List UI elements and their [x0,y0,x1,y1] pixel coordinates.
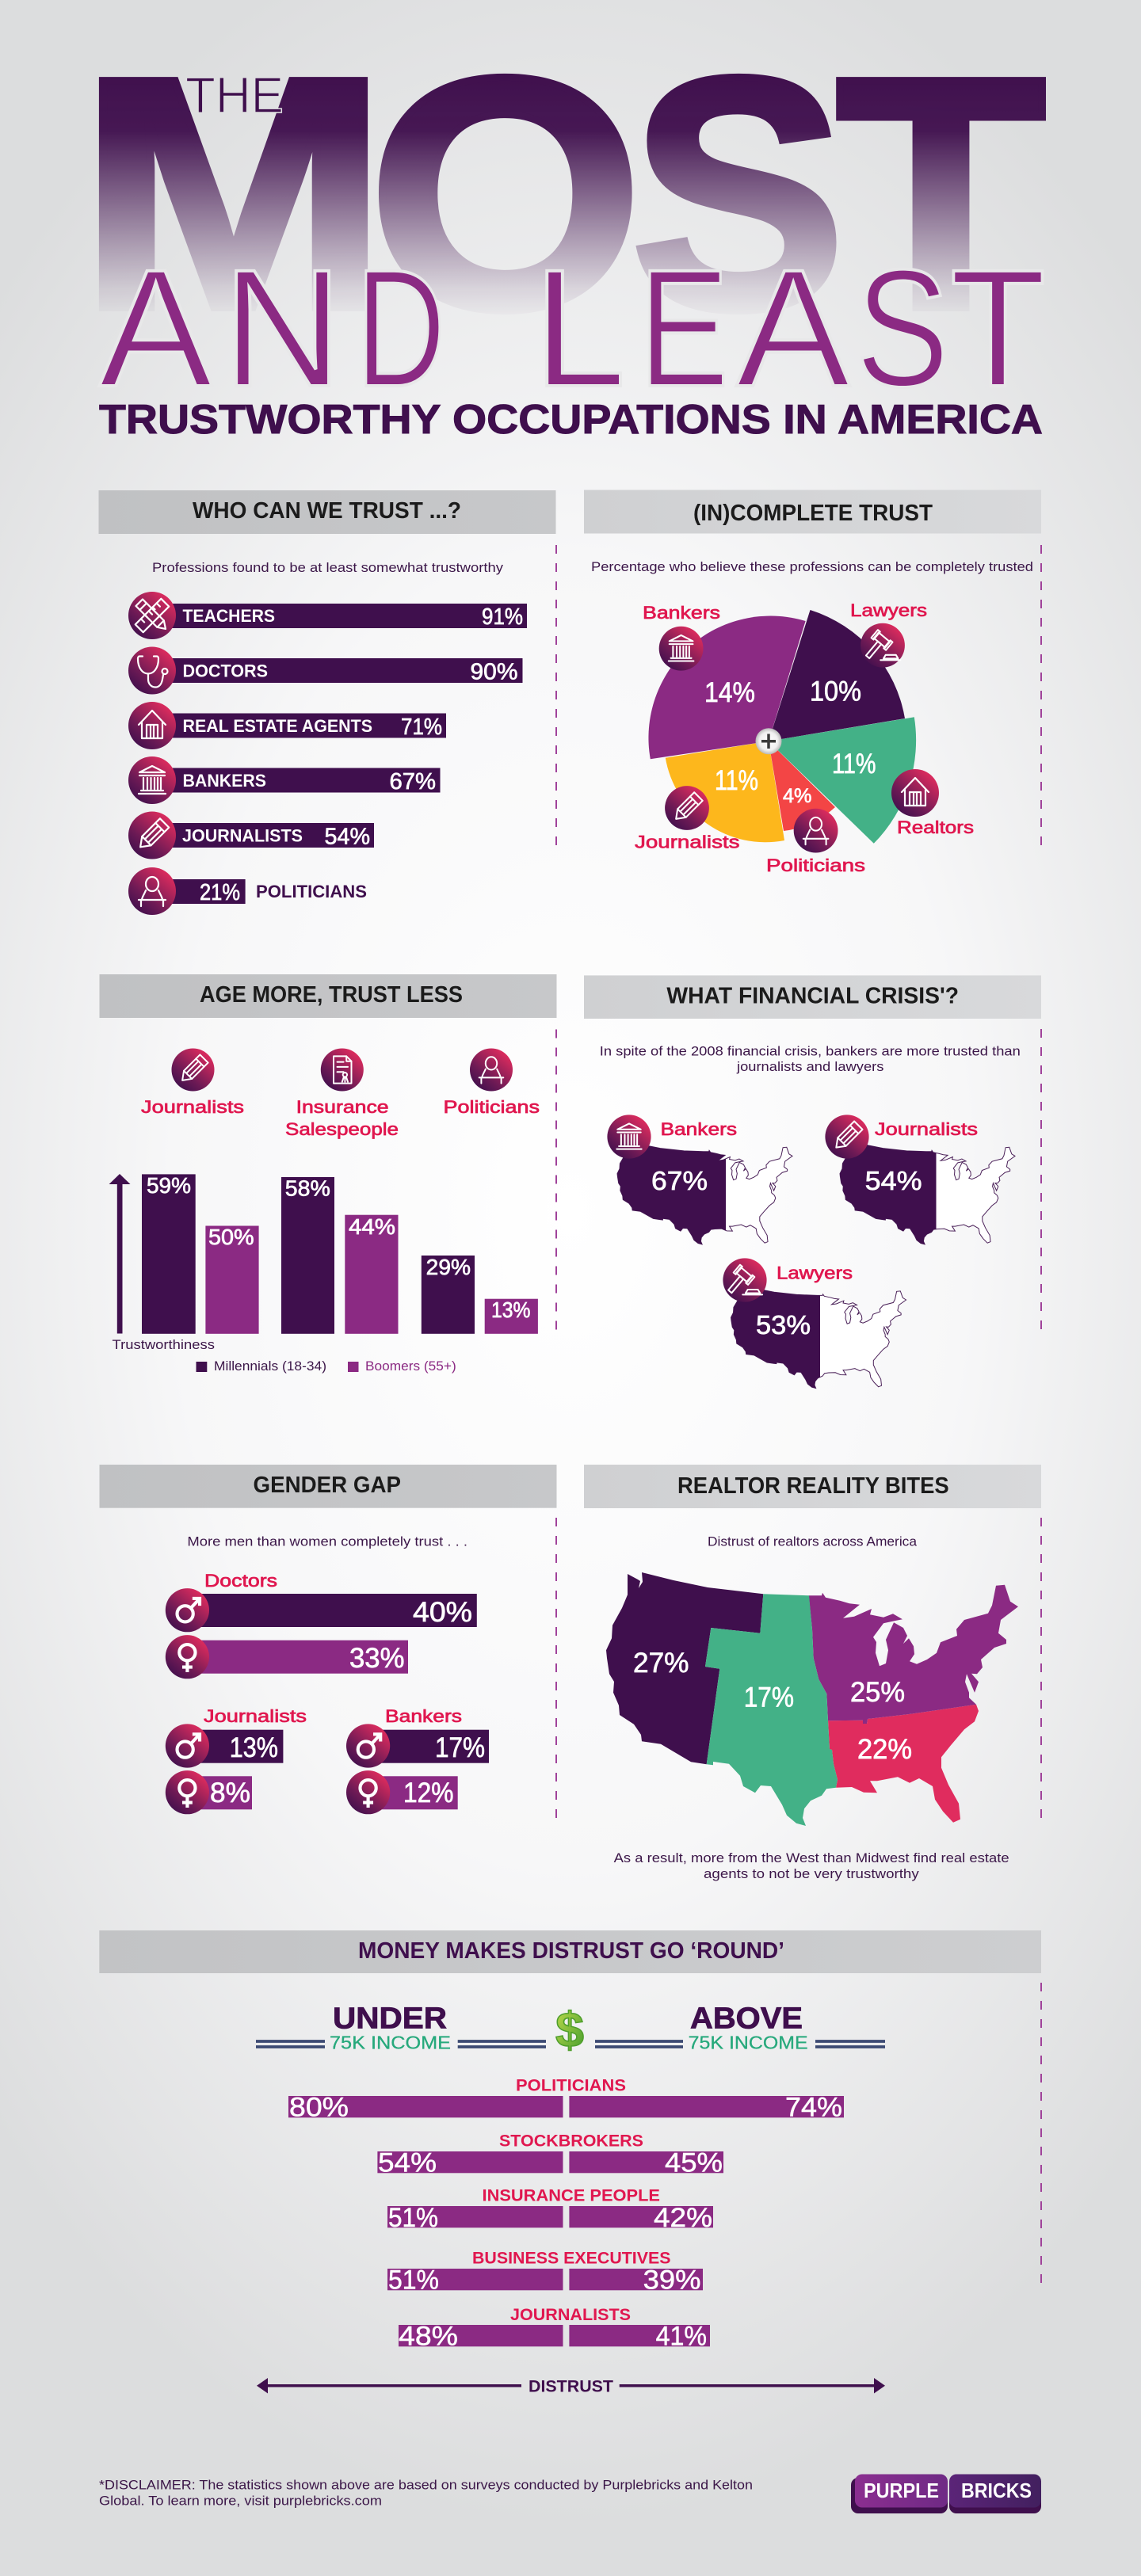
legend: above 75k: ABOVE [690,2002,803,2036]
arrow: trustworthiness axis [109,1174,130,1334]
heading bar [584,490,1041,534]
title words: AND LEAST: L [533,234,626,421]
map: bankers: Bankers [661,1119,737,1139]
pie label: lawyers: Lawyers [850,600,927,620]
bar: politicians: POLITICIANS [256,882,367,901]
bar: teachers: TEACHERS [182,606,275,626]
bar: real estate agents [128,702,446,749]
group: bankers: Bankers [385,1706,462,1726]
paragraph [614,1850,1009,1881]
regional US map [606,1572,1018,1826]
heading bar [584,975,1041,1019]
pie label: journalists [635,786,740,852]
group: bankers: 12% [403,1778,453,1808]
legend: Millennials (18-34) [214,1359,326,1374]
panel: money makes distrust go round [99,1930,1041,2395]
bar chart: 58% [285,1176,330,1201]
row: journalists: JOURNALISTS [510,2306,631,2324]
row: insurance people: INSURANCE PEOPLE [482,2187,660,2205]
bar: real estate agents: 71% [401,714,442,740]
map: journalists [825,1115,1015,1244]
bar: politicians: 21% [200,880,240,905]
heading bar [584,1465,1041,1508]
title word: MOST: O [368,10,643,379]
group: journalists [166,1706,307,1814]
subtitle: Percentage who believe these professions can be completely trusted [591,559,1033,574]
group: journalists: 8% [210,1778,250,1808]
regional US map: 25% [850,1677,905,1708]
panel: gender gap [100,1465,556,1820]
pie label: bankers [643,603,720,671]
title words: AND LEAST: N [223,234,342,421]
pie chart: 11% [715,765,758,796]
disclaimer: Global. To learn more, visit purplebricks.com [99,2493,382,2508]
paragraph: As a result, more from the West than Midwest find real estate [614,1850,1009,1865]
pie label: politicians: Politicians [766,855,865,875]
bar chart: 44% [349,1214,395,1239]
title words: AND LEAST: D [356,234,480,421]
heading: GENDER GAP [254,1473,401,1498]
title word: THE: THE [185,67,284,124]
bar chart: 13% [491,1298,530,1322]
heading: REALTOR REALITY BITES [677,1473,949,1499]
pie label: realtors [891,769,974,837]
row: stockbrokers: 45% [665,2148,723,2178]
bar chart: 50% [208,1225,254,1249]
heading: WHAT FINANCIAL CRISIS'? [666,983,959,1008]
legend [197,1359,456,1374]
logo: Purplebricks: PURPLE [864,2479,939,2502]
legend: Boomers (55+) [365,1359,456,1374]
row: politicians [288,2076,844,2123]
subtitle: Distrust of realtors across America [708,1534,918,1549]
subtitle: In spite of the 2008 financial crisis, bankers are more trusted than [600,1044,1021,1058]
panel: what financial crisis [584,975,1041,1389]
group: doctors [166,1571,477,1679]
group: bankers: 17% [435,1732,485,1763]
panel: who can we trust [98,490,556,915]
title words: AND LEAST: E [639,234,729,421]
pie chart: 4% [783,785,811,807]
row: politicians: 74% [785,2093,842,2123]
map: lawyers: 53% [756,1311,811,1340]
legend: above 75k [595,2002,885,2053]
row: journalists [399,2306,710,2352]
arrow: distrust axis [257,2377,885,2395]
title [98,73,1046,434]
icon: dollar sign: $ [555,2003,584,2058]
column label: politicians [444,1049,540,1117]
heading bar [99,1930,1041,1973]
pie chart: 11% [832,749,876,779]
row: politicians: 80% [289,2093,349,2123]
bar: doctors: 90% [471,659,518,684]
pie chart [648,610,916,844]
subtitle: More men than women completely trust . . . [187,1534,467,1549]
group: bankers [346,1706,489,1814]
group: journalists: Journalists [204,1706,307,1726]
heading: AGE MORE, TRUST LESS [200,982,463,1008]
disclaimer: *DISCLAIMER: The statistics shown above are based on surveys conducted by Purplebricks and Kelton [99,2478,753,2493]
bar: bankers: BANKERS [182,771,266,791]
subtitle [600,1044,1021,1074]
map: journalists: 54% [865,1167,922,1196]
panel: realtor reality bites [584,1465,1041,1881]
arrow: distrust axis: DISTRUST [529,2377,613,2395]
title word: MOST: T [836,10,1046,379]
bar: doctors: DOCTORS [182,661,268,681]
logo: Purplebricks [851,2475,1041,2513]
title subtitle: TRUSTWORTHY OCCUPATIONS IN AMERICA [99,397,1043,443]
row: insurance people [387,2187,713,2233]
row: politicians: POLITICIANS [516,2076,626,2094]
column label: journalists [141,1049,244,1117]
group: journalists: 13% [230,1732,278,1763]
axis label: Trustworthiness [113,1337,215,1352]
title word: MOST: S [631,10,845,379]
heading bar [100,1465,556,1508]
bar: teachers: 91% [482,604,523,630]
heading bar [100,974,556,1018]
column label: insurance salespeople: Insurance [296,1097,389,1117]
heading: WHO CAN WE TRUST ...? [193,498,461,524]
title words: AND LEAST: S [856,234,949,421]
bar: journalists: JOURNALISTS [182,825,303,846]
bar: journalists [128,811,374,859]
regional US map: 27% [633,1648,689,1679]
row: insurance people: 51% [388,2203,438,2233]
row: insurance people: 42% [654,2203,712,2233]
row: business executives: 39% [643,2265,700,2296]
group: doctors: 40% [413,1597,472,1628]
pie chart: 10% [810,676,861,707]
bar chart [142,1173,538,1334]
legend: above 75k: 75K INCOME [689,2033,808,2053]
regional US map: 17% [744,1682,794,1713]
disclaimer [99,2478,753,2508]
bar: politicians [128,867,367,915]
bar: real estate agents: REAL ESTATE AGENTS [182,716,372,736]
pie label: realtors: Realtors [897,817,974,837]
map: lawyers [723,1258,906,1389]
row: journalists: 41% [656,2322,707,2352]
title words: AND LEAST: A [99,234,212,421]
row: journalists: 48% [399,2322,458,2352]
subtitle: Professions found to be at least somewhat trustworthy [152,560,504,575]
title words: AND LEAST: A [736,234,850,421]
bar chart: 59% [147,1173,191,1198]
title word: MOST [98,73,1046,311]
map: bankers: 67% [651,1167,708,1196]
paragraph: agents to not be very trustworthy [704,1866,919,1881]
row: stockbrokers: STOCKBROKERS [499,2132,643,2150]
bar: teachers [128,592,527,639]
bar: journalists: 54% [325,824,370,849]
row: business executives: 51% [388,2265,439,2296]
row: stockbrokers: 54% [378,2148,437,2178]
heading: MONEY MAKES DISTRUST GO ‘ROUND’ [358,1938,784,1964]
row: business executives [387,2249,703,2296]
heading bar [98,490,556,534]
row: stockbrokers [377,2132,723,2178]
map: bankers [607,1115,792,1244]
row: business executives: BUSINESS EXECUTIVES [472,2249,670,2267]
panel: age more, trust less [100,974,556,1374]
legend: under 75k: UNDER [333,2002,447,2036]
bar: doctors [128,646,523,694]
map: journalists: Journalists [875,1119,978,1139]
pie label: journalists: Journalists [635,833,740,852]
legend: under 75k [256,2002,546,2053]
group: doctors: 33% [349,1643,404,1674]
column label: journalists: Journalists [141,1097,244,1117]
heading: (IN)COMPLETE TRUST [693,501,933,526]
title words: AND LEAST: T [950,234,1046,421]
title word: MOST: M [78,10,388,379]
bar chart: 29% [426,1255,471,1279]
column label: insurance salespeople [285,1049,399,1139]
pie chart: 14% [704,677,755,708]
pie label: lawyers [850,600,927,668]
column label: politicians: Politicians [444,1097,540,1117]
map: lawyers: Lawyers [777,1263,853,1283]
panel: incomplete trust [584,490,1041,875]
regional US map: 22% [857,1734,912,1765]
column label: insurance salespeople: Salespeople [285,1119,399,1139]
logo: Purplebricks: BRICKS [961,2479,1032,2502]
bar: bankers: 67% [390,769,436,795]
pie label: politicians [766,809,865,875]
legend: under 75k: 75K INCOME [330,2033,451,2053]
subtitle: journalists and lawyers [736,1059,883,1074]
group: doctors: Doctors [204,1571,277,1591]
bar: bankers [128,756,441,804]
pie label: bankers: Bankers [643,603,720,623]
